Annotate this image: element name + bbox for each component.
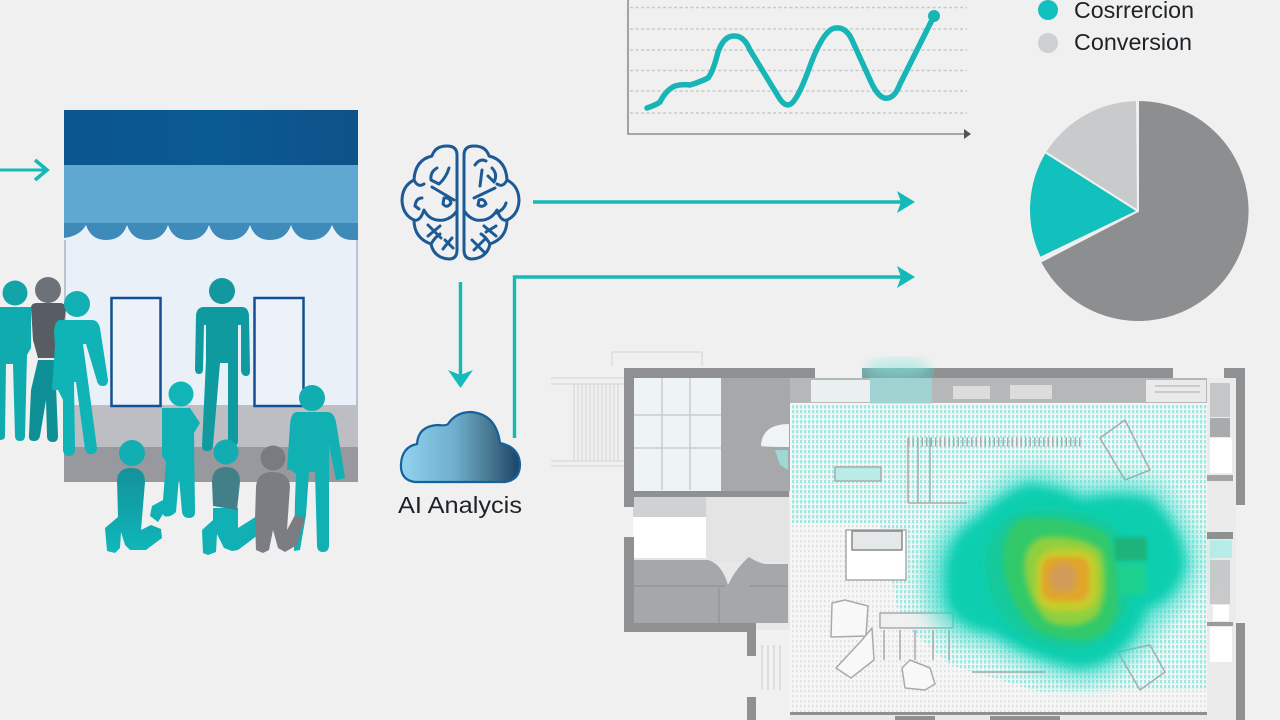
icon: brain — [402, 146, 519, 259]
shop window left — [112, 298, 160, 406]
heatmap: yellow zone — [1036, 549, 1098, 611]
arrow: brain to cloud — [448, 282, 473, 388]
legend dot: teal — [1038, 0, 1058, 20]
brain right hemisphere — [464, 146, 519, 259]
brain left hemisphere — [402, 146, 457, 259]
heatmap: outer teal blob — [945, 484, 1185, 668]
chart: line chart — [628, 0, 971, 139]
arrow: into store — [0, 160, 47, 180]
legend label 2: Conversion — [1074, 29, 1192, 55]
heatmap: orange core — [1042, 557, 1089, 601]
chart axis arrowhead — [964, 129, 971, 139]
heatmap: green lobe — [1116, 563, 1146, 595]
person: kneeling left — [105, 440, 162, 553]
interior floors — [634, 378, 1236, 720]
person: standing by door — [195, 278, 250, 451]
pie slice: large gray — [1040, 100, 1250, 322]
floor rack lines — [884, 438, 1045, 672]
heatmap: dark green patch — [1114, 537, 1147, 561]
person: gray kneeling — [255, 446, 305, 553]
arrow: brain to pie chart — [533, 191, 915, 213]
arrow: cloud to pie chart — [514, 266, 915, 438]
right service column — [1207, 378, 1236, 720]
furniture — [831, 420, 1165, 690]
chart gridlines — [630, 8, 967, 113]
pie slice: teal — [1029, 152, 1138, 258]
chart axes — [628, 0, 966, 134]
shop window right — [254, 298, 304, 406]
heatmap: inner teal-green band — [985, 509, 1129, 650]
window room — [634, 378, 721, 491]
person: kneeling centre — [202, 440, 258, 555]
icon: cloud — [401, 412, 520, 482]
heatmap: yellow-green zone — [1024, 537, 1105, 626]
stairs — [551, 352, 702, 466]
top counter strip — [790, 378, 1207, 403]
chart trend line — [647, 20, 932, 108]
person: gray-shirted in group — [29, 277, 66, 442]
legend — [1038, 0, 1194, 55]
label: AI Analycis: AI Analycis — [398, 492, 522, 518]
lower stair closet — [756, 630, 790, 720]
heatmap: light dotted field — [791, 358, 1206, 692]
pie slice: light gray — [1045, 100, 1138, 211]
person: standing far left — [0, 280, 31, 441]
legend dot: gray — [1038, 33, 1058, 53]
person: standing right — [287, 385, 345, 552]
lower left room — [633, 497, 788, 623]
walls — [624, 368, 1245, 720]
gray room — [721, 378, 790, 491]
heatmap: green ring — [1003, 518, 1118, 640]
panel: floor plan heatmap — [551, 352, 1245, 720]
chart: pie — [1029, 100, 1250, 322]
heatmap: center — [1049, 563, 1077, 593]
panel: storefront — [64, 110, 358, 482]
person: mid walking — [150, 382, 200, 522]
person: teal in front of group — [52, 291, 108, 456]
heatmap: outer teal fringe — [925, 470, 1197, 680]
chart end dot — [928, 10, 940, 22]
